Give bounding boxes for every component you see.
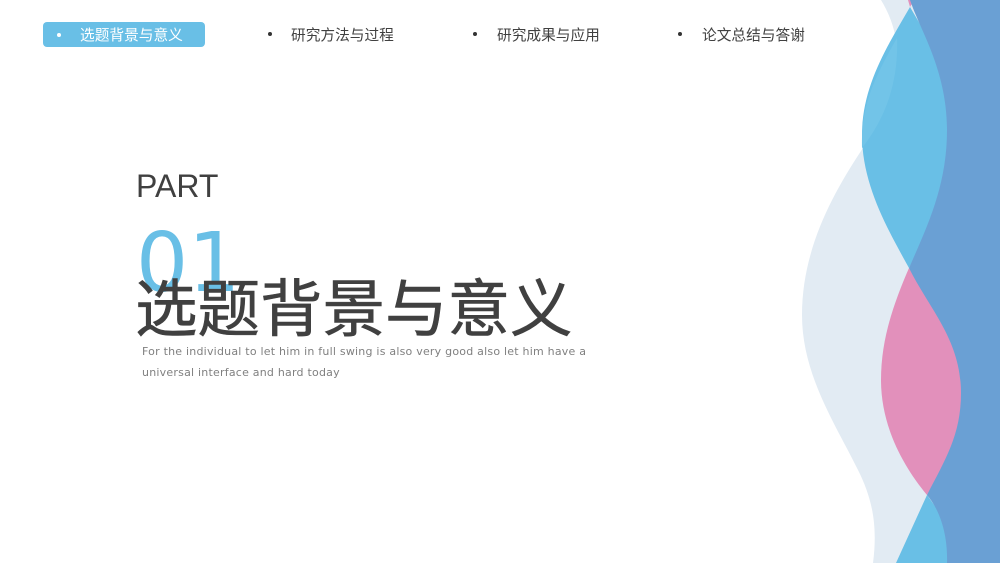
wave: blue band <box>909 0 1000 563</box>
number: 01: 01 <box>136 216 240 311</box>
wave: pale grey band <box>802 0 1000 563</box>
nav item: results: 研究成果与应用 <box>497 24 600 45</box>
wave: pink tip at top <box>908 0 914 7</box>
title: 选题背景与意义 <box>135 258 572 349</box>
description text <box>142 345 586 379</box>
nav item: methods: 研究方法与过程 <box>291 24 394 45</box>
description text: For the individual to let him in full swing is also very good also let him have a <box>142 345 586 358</box>
nav item: conclusion: 论文总结与答谢 <box>702 24 805 45</box>
wave: lighter highlight on lens <box>862 38 897 148</box>
wave: pink lens <box>881 268 961 495</box>
description text: universal interface and hard today <box>142 366 340 379</box>
wave: light blue lower lens <box>896 495 950 563</box>
nav item: active tab <box>43 22 205 47</box>
heading: PART: PART <box>136 168 218 204</box>
nav item: active tab: 选题背景与意义 <box>80 24 183 45</box>
wave: light blue upper lens <box>862 7 947 268</box>
